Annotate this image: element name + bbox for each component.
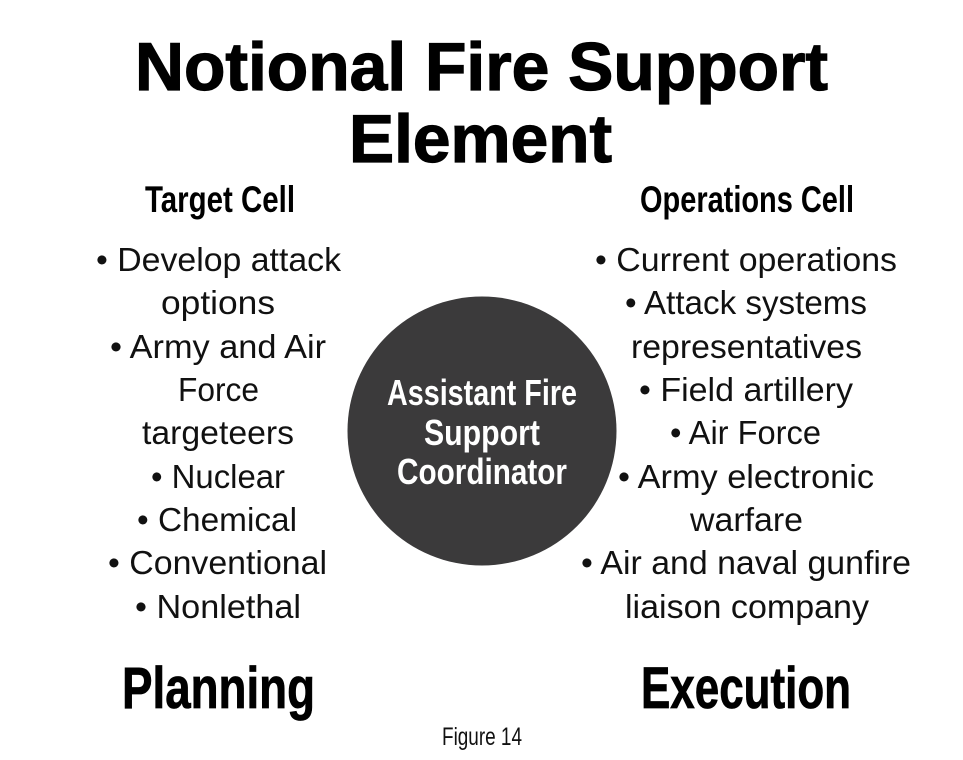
list: operations cell items: • Air and naval gunfire [581, 544, 911, 581]
list: operations cell items: warfare [689, 501, 803, 538]
list: operations cell items: liaison company [625, 588, 870, 625]
list: target cell items: • Army and Air [110, 328, 326, 365]
center circle: assistant fire support coordinator: Coordinator [397, 451, 567, 492]
list: operations cell items: • Army electronic [618, 458, 874, 495]
heading: target cell: Target Cell [145, 179, 295, 220]
heading: operations cell: Operations Cell [640, 179, 854, 220]
center circle: assistant fire support coordinator [348, 296, 616, 566]
panel: operations cell [581, 179, 911, 625]
list: target cell items: targeteers [142, 414, 294, 451]
caption: figure 14: Figure 14 [442, 723, 522, 751]
list: target cell items: • Chemical [137, 501, 297, 538]
center circle: assistant fire support coordinator: Support [424, 412, 540, 453]
list: operations cell items: • Attack systems [625, 284, 867, 321]
title: Element [349, 101, 612, 177]
list: operations cell items: • Air Force [670, 414, 821, 451]
list: target cell items [96, 241, 342, 625]
list: target cell items: • Develop attack [96, 241, 342, 278]
panel: target cell [96, 179, 342, 625]
label: execution: Execution [641, 656, 851, 721]
list: target cell items: • Nuclear [151, 458, 285, 495]
label: planning: Planning [122, 656, 315, 721]
title: Notional Fire Support [135, 29, 828, 105]
list: target cell items: Force [178, 371, 259, 408]
list: operations cell items [581, 241, 911, 625]
title [135, 29, 828, 177]
list: target cell items: • Nonlethal [135, 588, 301, 625]
list: operations cell items: representatives [631, 328, 862, 365]
center circle: assistant fire support coordinator: Assistant Fire [387, 372, 577, 413]
list: operations cell items: • Field artillery [639, 371, 854, 408]
list: target cell items: options [161, 284, 275, 321]
list: target cell items: • Conventional [108, 544, 327, 581]
list: operations cell items: • Current operations [595, 241, 897, 278]
